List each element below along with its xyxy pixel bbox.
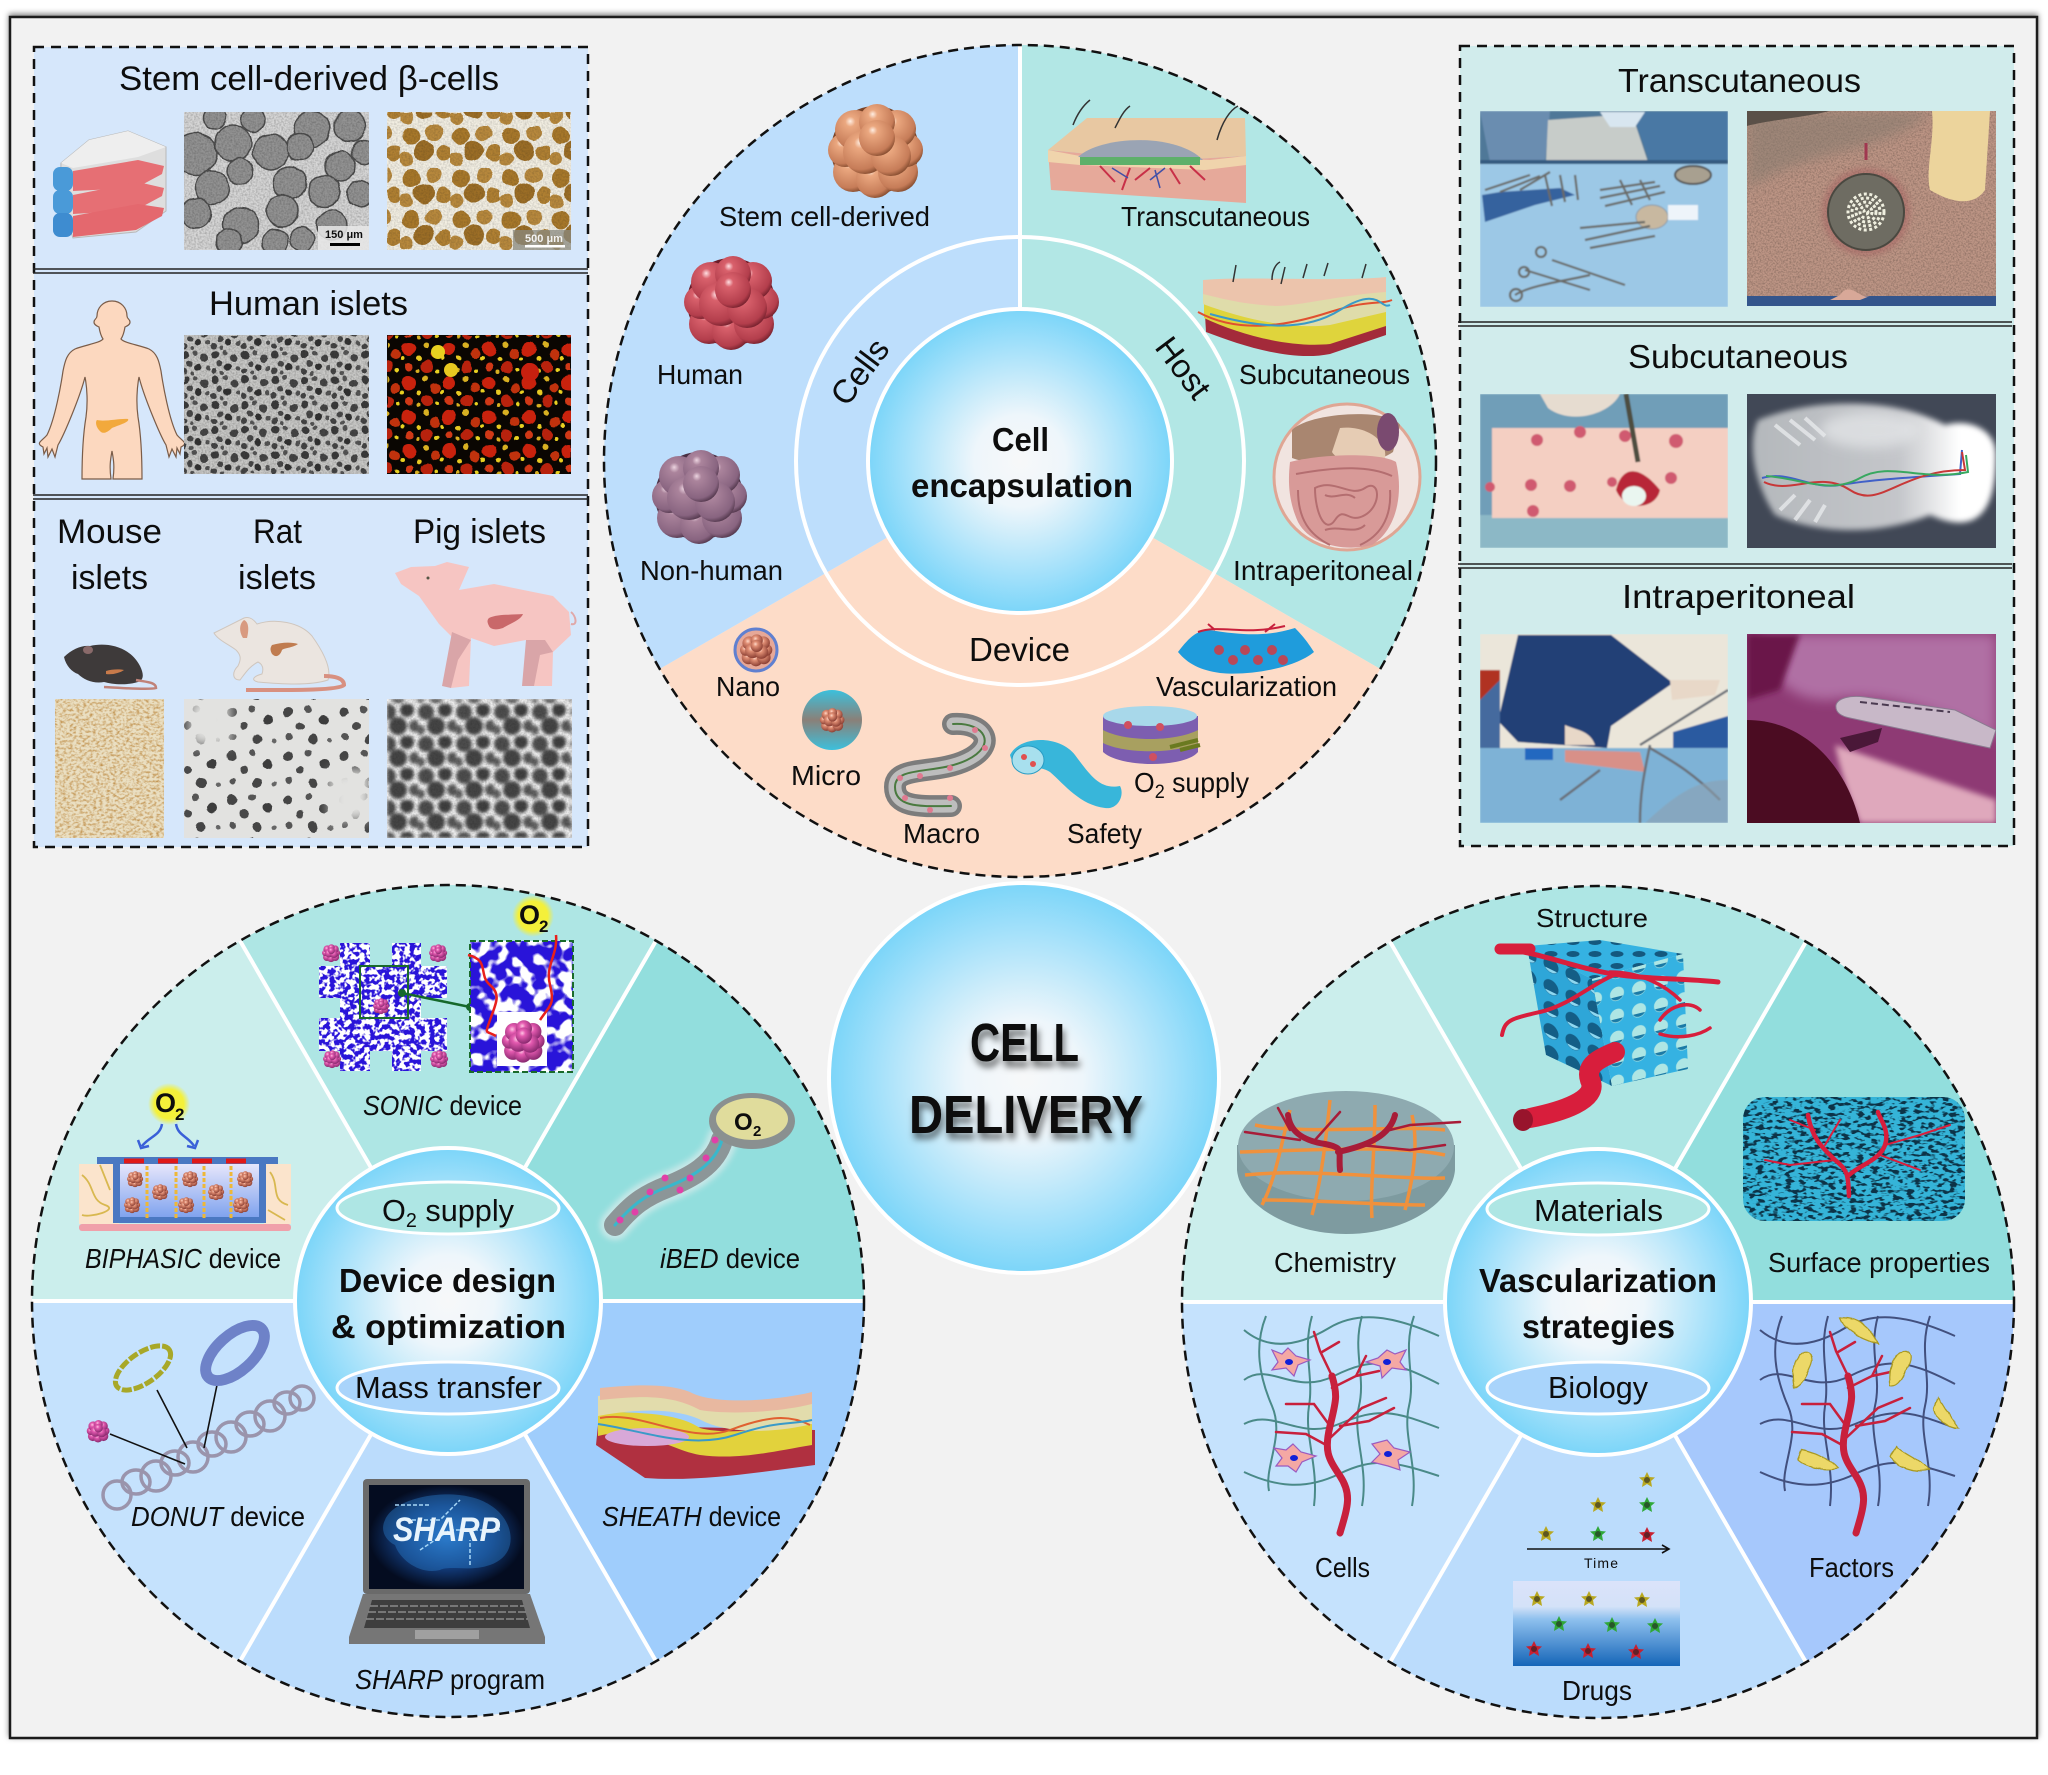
photo: stem cell clusters stained: 500 μm	[525, 233, 563, 245]
icon: micro capsule	[802, 690, 862, 750]
label: device: Device	[969, 631, 1070, 668]
label: iBED device: iBED device	[660, 1243, 800, 1274]
label: SHARP program: SHARP program	[355, 1664, 545, 1695]
icon: macro device	[895, 724, 988, 813]
label: cells: Cells	[1315, 1552, 1370, 1583]
photo: transcutaneous implant	[1747, 111, 1996, 306]
panel: cell sources	[33, 47, 588, 847]
photo: stem cell clusters stained	[387, 112, 571, 250]
label: stem cell-derived: Stem cell-derived	[719, 201, 930, 232]
pill: O2 supply: 2	[406, 1210, 417, 1232]
icon: subcutaneous skin	[1198, 262, 1392, 356]
icon: SHEATH device	[596, 1385, 815, 1479]
pill: biology	[1487, 1362, 1709, 1414]
pill: mass transfer: Mass transfer	[355, 1370, 542, 1405]
heading: subcutaneous: Subcutaneous	[1628, 338, 1848, 375]
title: cell: CELL	[970, 1013, 1079, 1073]
heading: rat islets: Rat	[253, 513, 303, 551]
label: macro: Macro	[903, 818, 980, 849]
icon: intraperitoneal organs	[1274, 404, 1420, 550]
icon: SHARP laptop: SHARP	[393, 1511, 500, 1549]
icon: stem cell-derived cluster	[828, 104, 923, 198]
label: BIPHASIC device: BIPHASIC device	[85, 1243, 281, 1274]
photo: mouse islets	[55, 699, 164, 838]
panel: cell encapsulation wheel	[604, 45, 1436, 877]
icon: pig	[395, 562, 576, 688]
icon: SONIC device left lattice	[319, 943, 474, 1071]
label: intraperitoneal: Intraperitoneal	[1233, 555, 1413, 586]
icon: chemistry disc	[1237, 1091, 1460, 1234]
icon: transcutaneous skin	[1048, 100, 1246, 203]
icon: SONIC device detail	[468, 935, 573, 1072]
pill: O2 supply	[337, 1182, 559, 1234]
label: subcutaneous: Subcutaneous	[1239, 359, 1410, 390]
hub title line 1: Device design	[339, 1262, 556, 1299]
panel: central cell delivery hub	[829, 883, 1219, 1273]
icon: human cluster	[684, 256, 779, 350]
hub title line 2: & optimization	[331, 1308, 566, 1345]
icon: lattice scaffold with vessels	[1500, 940, 1718, 1131]
pill: O2 supply: O	[382, 1193, 406, 1228]
icon: oxygen badge sonic	[512, 895, 554, 937]
icon: vascular mesh with cells	[1244, 1316, 1439, 1533]
hub: device design	[295, 1148, 601, 1454]
pill: materials: Materials	[1534, 1193, 1663, 1228]
label: o2 supply: O	[1134, 767, 1156, 798]
label: o2 supply: 2	[1155, 782, 1165, 803]
hub title line 2: strategies	[1522, 1308, 1675, 1345]
label: DONUT device: DONUT device	[131, 1501, 305, 1532]
icon: drug release chart	[1513, 1472, 1680, 1666]
photo: rat islets	[184, 699, 369, 838]
photo: intraperitoneal surgery	[1480, 634, 1728, 823]
label: factors: Factors	[1809, 1552, 1894, 1583]
label: safety: Safety	[1067, 818, 1142, 849]
label: surface properties: Surface properties	[1768, 1247, 1990, 1278]
heading: transcutaneous: Transcutaneous	[1618, 62, 1861, 99]
photo: surgical instruments	[1480, 111, 1728, 307]
heading: mouse islets line 2: islets	[71, 559, 148, 597]
icon: mouse	[64, 645, 156, 689]
label: non-human: Non-human	[640, 555, 783, 586]
label: SHEATH device: SHEATH device	[602, 1501, 781, 1532]
pill: O2 supply: supply	[417, 1193, 514, 1228]
heading: rat islets line 2: islets	[238, 559, 316, 597]
pill: materials	[1487, 1183, 1709, 1235]
icon: drug release chart: Time	[1584, 1555, 1618, 1571]
heading: pig islets: Pig islets	[413, 513, 546, 551]
icon: non-human cluster	[652, 450, 747, 544]
label: cells: Cells	[823, 331, 896, 412]
panel: vascularization wheel	[1182, 886, 2014, 1718]
icon: iBED device: 2	[753, 1123, 761, 1140]
heading: stem cell-derived beta cells: Stem cell-derived β-cells	[119, 60, 499, 98]
icon: human body with pancreas	[39, 301, 185, 479]
photo: subcutaneous surgery	[1480, 394, 1728, 548]
photo: subcutaneous x-ray	[1747, 394, 1996, 548]
photo: intraperitoneal implant	[1747, 634, 1996, 823]
photo: stem cell clusters grey: 150 μm	[325, 229, 363, 241]
label: vascularization: Vascularization	[1156, 671, 1337, 702]
label: transcutaneous: Transcutaneous	[1121, 201, 1310, 232]
photo: human islets grey	[184, 335, 369, 474]
icon: rat	[214, 617, 344, 690]
panel: implantation sites	[1458, 46, 2014, 846]
label: host: Host	[1148, 329, 1219, 406]
photo: pig islets	[387, 699, 572, 838]
center hub	[868, 309, 1172, 613]
heading: intraperitoneal: Intraperitoneal	[1622, 578, 1855, 615]
label: nano: Nano	[716, 671, 780, 702]
photo: stem cell clusters grey	[184, 112, 369, 250]
hub: vascularization strategies	[1445, 1149, 1751, 1455]
label: SONIC device: SONIC device	[363, 1090, 522, 1121]
icon: safety device	[1010, 740, 1122, 808]
pill: biology: Biology	[1548, 1370, 1648, 1405]
hub title	[911, 421, 1133, 504]
label: micro: Micro	[791, 760, 861, 791]
label: human: Human	[657, 359, 743, 390]
hub title: Cell	[992, 421, 1049, 458]
icon: culture flasks	[53, 131, 166, 238]
icon: iBED device: O	[734, 1109, 753, 1136]
photo: human islets fluorescent	[387, 335, 571, 474]
label: o2 supply: supply	[1165, 767, 1249, 798]
hub title: encapsulation	[911, 467, 1133, 504]
icon: DONUT device	[87, 1316, 314, 1509]
label: chemistry: Chemistry	[1274, 1247, 1396, 1278]
icon: vascular mesh with factors	[1760, 1316, 1958, 1533]
label: drugs: Drugs	[1562, 1675, 1632, 1706]
hub title line 1: Vascularization	[1479, 1262, 1717, 1299]
icon: vascularization device	[1178, 624, 1314, 674]
panel: device design wheel	[32, 885, 864, 1717]
pill: mass transfer	[337, 1362, 559, 1414]
icon: oxygen supply disc	[1103, 706, 1200, 764]
icon: surface properties block	[1743, 1097, 1965, 1221]
heading: mouse islets: Mouse	[57, 513, 162, 551]
label: structure: Structure	[1536, 903, 1648, 933]
icon: oxygen badge biphasic	[148, 1083, 190, 1125]
icon: iBED device	[615, 1093, 795, 1225]
icon: SHARP laptop	[349, 1479, 545, 1644]
heading: human islets: Human islets	[209, 285, 408, 323]
title: delivery: DELIVERY	[909, 1085, 1143, 1145]
icon: nano capsule	[735, 629, 777, 671]
icon: BIPHASIC device	[79, 1124, 291, 1231]
